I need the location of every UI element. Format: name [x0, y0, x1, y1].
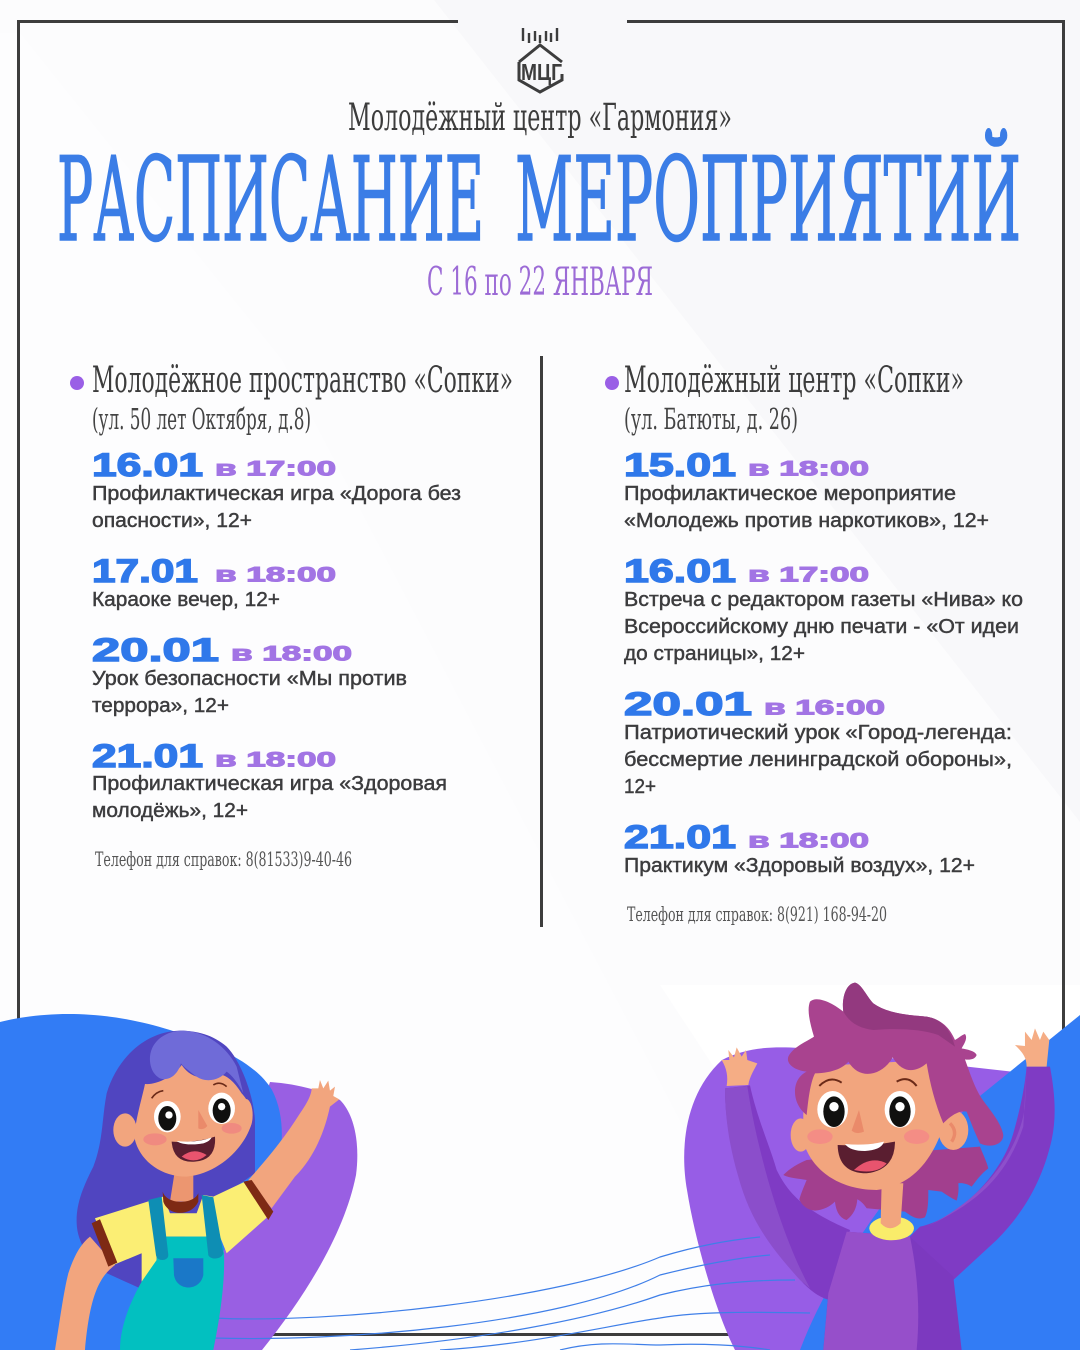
event 20.01: Урок безопасности «Мы против	[92, 668, 407, 690]
title: РАСПИСАНИЕ	[57, 133, 484, 268]
contact phone: Телефон для справок: 8(921) 168-94-20	[627, 902, 887, 926]
venue address: (ул. 50 лет Октября, д.8)	[92, 402, 311, 436]
event 17.01: 17.01	[92, 553, 198, 589]
event 20.01: 12+	[624, 776, 656, 798]
event 21.01: 21.01	[624, 819, 736, 855]
event 21.01: Профилактическая игра «Здоровая	[92, 773, 447, 795]
blob: right purple	[684, 1047, 1015, 1350]
event 15.01: 15.01	[624, 447, 736, 483]
event 16.01: в 17:00	[748, 562, 869, 586]
event 21.01: молодёжь», 12+	[92, 800, 248, 822]
event 20.01: террора», 12+	[92, 695, 229, 717]
event 20.01	[624, 686, 1012, 798]
blob: left purple	[200, 1082, 357, 1350]
bullet	[70, 376, 84, 390]
event 16.01: опасности», 12+	[92, 510, 252, 532]
date range: С 16 по 22 ЯНВАРЯ	[427, 260, 653, 305]
blob: left blue	[0, 1014, 282, 1350]
venue address: (ул. Батюты, д. 26)	[624, 402, 798, 436]
blob: right blue	[800, 1015, 1080, 1350]
event 17.01: в 18:00	[215, 562, 336, 586]
event 15.01: Профилактическое мероприятие	[624, 483, 956, 505]
event 21.01	[92, 738, 447, 822]
event 15.01	[624, 447, 989, 532]
event 16.01: Всероссийскому дню печати - «От идеи	[624, 616, 1019, 638]
event 16.01	[92, 447, 461, 532]
event 20.01: Патриотический урок «Город-легенда:	[624, 722, 1012, 744]
panel: right venue schedule	[605, 360, 1023, 926]
column divider	[540, 356, 543, 927]
event 20.01: в 18:00	[231, 642, 352, 666]
bullet	[605, 376, 619, 390]
event 21.01: Практикум «Здоровый воздух», 12+	[624, 855, 975, 877]
venue name: Молодёжное пространство «Сопки»	[92, 360, 513, 401]
event 21.01: 21.01	[92, 738, 203, 774]
event 16.01: Профилактическая игра «Дорога без	[92, 483, 461, 505]
event 21.01: в 18:00	[748, 828, 869, 852]
event 20.01	[92, 632, 407, 717]
decorative wave lines	[212, 1237, 810, 1350]
event 16.01: в 17:00	[215, 456, 336, 480]
event 20.01: 20.01	[624, 686, 752, 722]
event 15.01: в 18:00	[748, 456, 869, 480]
illustration: girl	[55, 1031, 339, 1350]
event 15.01: «Молодежь против наркотиков», 12+	[624, 510, 989, 532]
logo	[519, 28, 562, 92]
organisation heading: Молодёжный центр «Гармония»	[348, 96, 732, 139]
illustration: boy	[722, 983, 1055, 1350]
event 20.01: 20.01	[92, 632, 219, 668]
event 17.01: Караоке вечер, 12+	[92, 589, 280, 611]
event 16.01: Встреча с редактором газеты «Нива» ко	[624, 589, 1023, 611]
event 21.01: в 18:00	[215, 748, 336, 772]
event 16.01	[624, 553, 1023, 665]
event 21.01	[624, 819, 975, 877]
event 16.01: до страницы», 12+	[624, 643, 805, 665]
event 16.01: 16.01	[624, 553, 736, 589]
panel: left venue schedule	[70, 360, 513, 871]
event 17.01	[92, 553, 336, 611]
event 20.01: бессмертие ленинградской обороны»,	[624, 749, 1012, 771]
event 20.01: в 16:00	[764, 696, 885, 720]
event 16.01: 16.01	[92, 447, 203, 483]
contact phone: Телефон для справок: 8(81533)9-40-46	[95, 847, 352, 871]
logo: МЦГ	[521, 59, 562, 85]
